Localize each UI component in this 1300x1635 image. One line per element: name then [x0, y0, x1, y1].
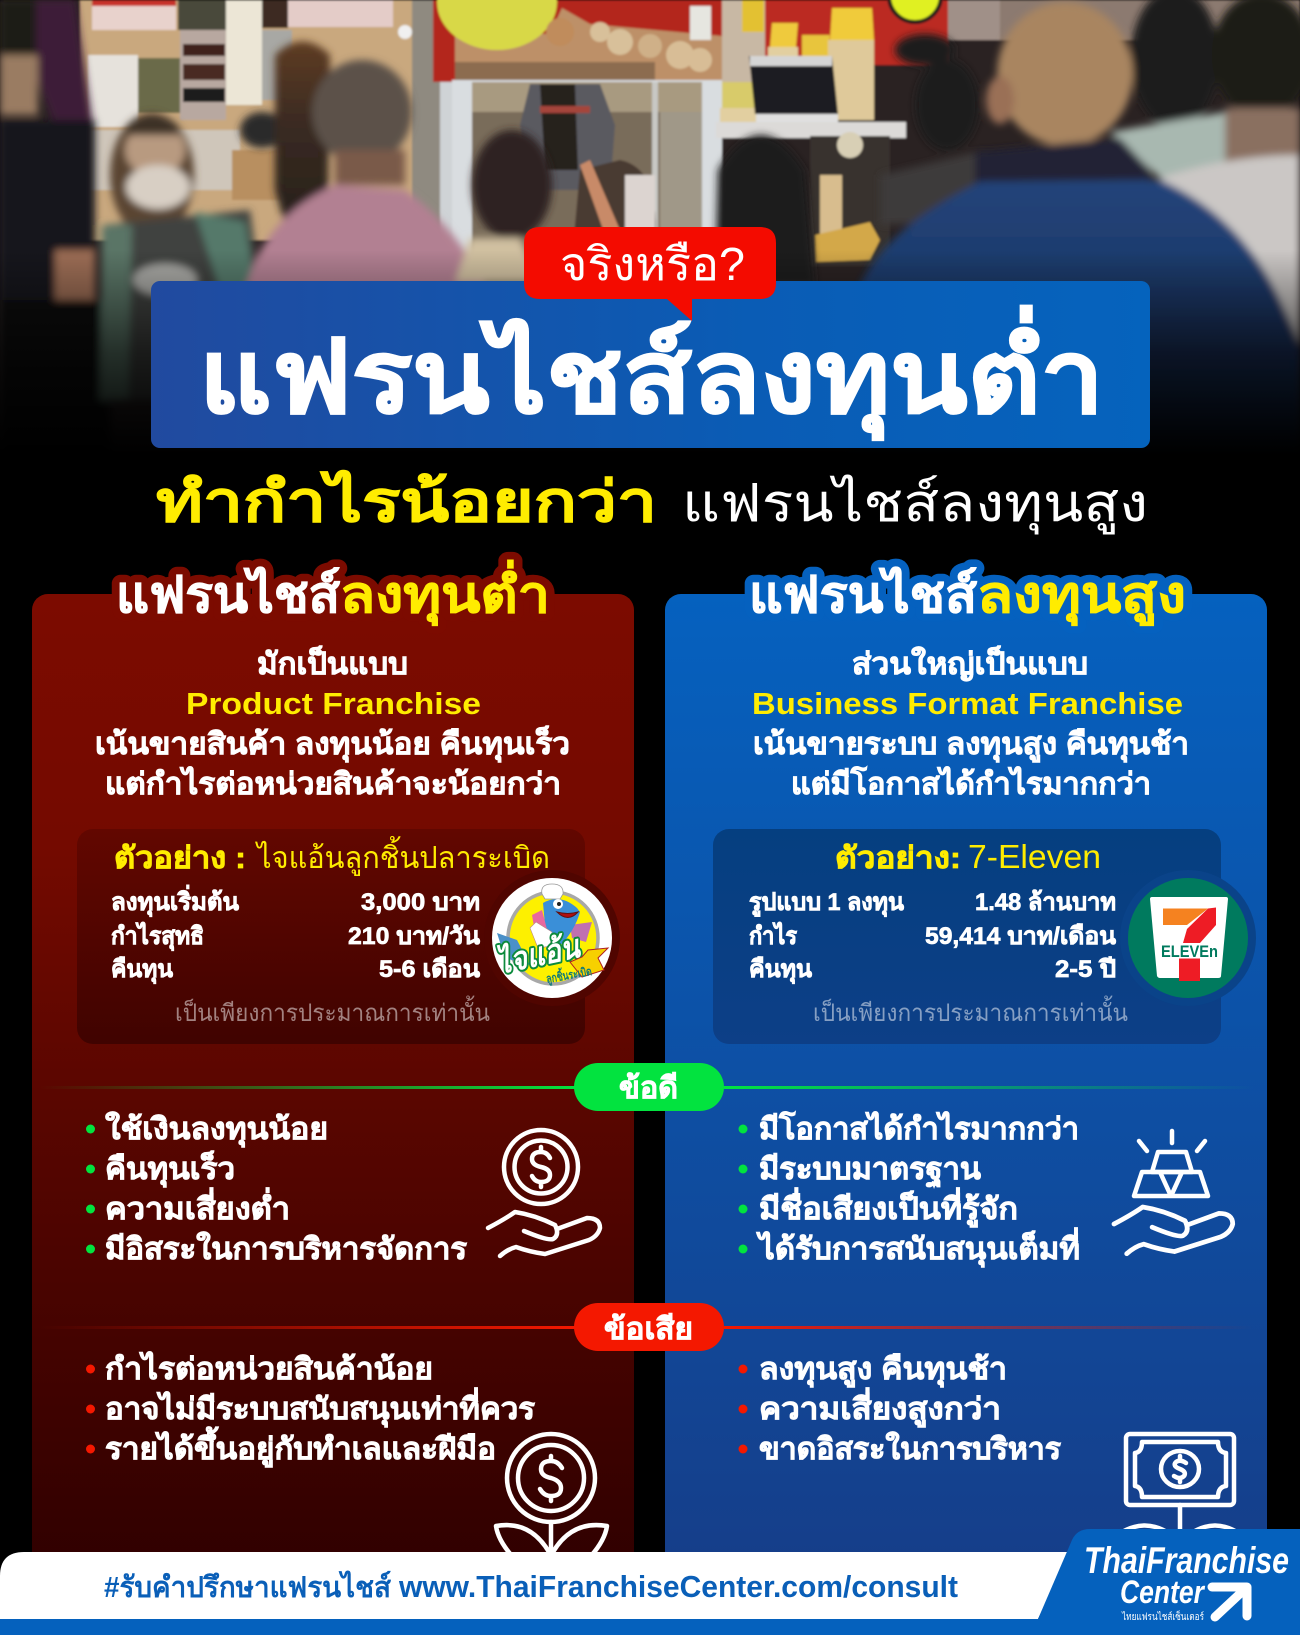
divider with badge: cons — [40, 1303, 1254, 1351]
panel heading — [749, 566, 1186, 626]
pros list — [86, 1111, 467, 1266]
description: Business Format Franchise — [752, 686, 1183, 721]
example box: 1.48 ล้านบาท — [975, 889, 1116, 916]
cons list: อาจไม่มีระบบสนับสนุนเท่าที่ควร — [105, 1387, 535, 1428]
pros list: มีอิสระในการบริหารจัดการ — [105, 1231, 467, 1266]
icon: coin over hand — [488, 1130, 600, 1256]
divider with badge: pros — [40, 1063, 1254, 1111]
pros list: ความเสี่ยงต่ำ — [105, 1187, 290, 1226]
striped shirt man — [312, 60, 412, 164]
callout bubble: จริงหรือ? — [524, 227, 776, 321]
panel heading: แฟรนไชส์ — [116, 566, 340, 623]
description: Product Franchise — [186, 686, 481, 721]
bald man — [997, 2, 1133, 146]
shop shelves — [80, 0, 450, 240]
example box: รูปแบบ 1 ลงทุน — [749, 889, 905, 918]
pros list: คืนทุนเร็ว — [105, 1150, 235, 1188]
cons list — [86, 1351, 535, 1468]
example box: 59,414 บาท/เดือน — [925, 923, 1117, 950]
divider with badge: pros: ข้อดี — [619, 1072, 678, 1105]
example box: คืนทุน — [111, 956, 174, 985]
subtitle: แฟรนไชส์ลงทุนสูง — [682, 474, 1148, 535]
long hair — [240, 112, 284, 148]
footer bar — [0, 1529, 1300, 1635]
dark hair center — [472, 130, 552, 240]
cons list: ลงทุนสูง คืนทุนช้า — [759, 1353, 1007, 1388]
example box: เป็นเพียงการประมาณการเท่านั้น — [175, 995, 490, 1027]
footer text: www.ThaiFranchiseCenter.com/consult — [398, 1569, 958, 1604]
panel heading: แฟรนไชส์ — [749, 566, 977, 623]
panel heading: ลงทุนต่ำ — [340, 560, 550, 626]
black hijab — [715, 135, 815, 285]
woman with mask — [110, 113, 194, 237]
pros list: มีระบบมาตรฐาน — [759, 1153, 981, 1189]
panel heading: แฟรนไชส์ — [116, 566, 340, 623]
example box: กำไรสุทธิ — [111, 921, 204, 952]
footer text — [104, 1569, 958, 1604]
divider with badge: cons: ข้อเสีย — [604, 1313, 693, 1346]
example box: ไจแอ้นลูกชิ้นปลาระเบิด — [255, 836, 550, 876]
pros list: ใช้เงินลงทุนน้อย — [105, 1111, 328, 1148]
icon: banknote plant — [1124, 1434, 1235, 1531]
pros list: มีชื่อเสียงเป็นที่รู้จัก — [759, 1187, 1018, 1228]
example box — [77, 829, 585, 1044]
panel heading: ลงทุนสูง — [977, 567, 1186, 626]
description: แต่มีโอกาสได้กำไรมากกว่า — [791, 765, 1151, 801]
example box: 3,000 บาท — [361, 889, 480, 916]
cons list: ขาดอิสระในการบริหาร — [759, 1431, 1061, 1466]
stall sign — [433, 0, 722, 82]
title text: แฟรนไชส์ลงทุนต่ำ — [199, 305, 1104, 441]
panel: high investment franchise — [665, 566, 1267, 1594]
panel: low investment franchise — [32, 560, 634, 1594]
fade to black — [0, 250, 1300, 455]
cons list — [738, 1353, 1061, 1466]
logo: ThaiFranchise Center: Center — [1120, 1574, 1205, 1610]
example box: 5-6 เดือน — [379, 956, 481, 983]
example box: 7-Eleven — [968, 838, 1101, 875]
example box: 210 บาท/วัน — [348, 923, 481, 950]
example box: ตัวอย่าง : — [114, 842, 246, 875]
pros list — [738, 1110, 1080, 1268]
example box — [713, 829, 1221, 1044]
example box: 2-5 ปี — [1055, 956, 1116, 983]
example box: กำไร — [749, 921, 797, 950]
pros list: มีโอกาสได้กำไรมากกว่า — [759, 1110, 1079, 1146]
example box: เป็นเพียงการประมาณการเท่านั้น — [813, 995, 1128, 1027]
description: เน้นขายสินค้า ลงทุนน้อย คืนทุนเร็ว — [95, 725, 570, 763]
logo: 7-Eleven: ELEVEn — [1161, 942, 1218, 961]
title banner: แฟรนไชส์ลงทุนต่ำ — [199, 305, 1104, 441]
left man — [32, 0, 98, 126]
panel heading: แฟรนไชส์ — [749, 566, 977, 623]
logo: 7-Eleven — [1120, 870, 1256, 1006]
panel heading — [116, 560, 550, 626]
cons list: ความเสี่ยงสูงกว่า — [759, 1387, 1001, 1428]
description: มักเป็นแบบ — [257, 645, 408, 681]
description: เน้นขายระบบ ลงทุนสูง คืนทุนช้า — [753, 728, 1189, 763]
title banner — [151, 281, 1150, 448]
pros list: ได้รับการสนับสนุนเต็มที่ — [756, 1227, 1080, 1268]
right people — [895, 34, 955, 66]
subtitle — [156, 469, 1148, 535]
description: ส่วนใหญ่เป็นแบบ — [852, 645, 1088, 682]
logo: Jai-an fish balls: ลูกชิ้นระเบิด — [545, 961, 593, 987]
example box: คืนทุน — [749, 956, 813, 985]
panel heading: ลงทุนต่ำ — [340, 560, 550, 626]
stall glass — [452, 80, 722, 285]
subtitle: ทำกำไรน้อยกว่า — [156, 469, 657, 533]
cons list: กำไรต่อหน่วยสินค้าน้อย — [105, 1351, 433, 1386]
logo: ThaiFranchise Center: ไทยแฟรนไชส์เซ็นเตอร์ — [1121, 1609, 1205, 1623]
callout bubble: จริงหรือ?: จริงหรือ? — [560, 238, 745, 290]
logo: Jai-an fish balls — [484, 870, 620, 1006]
footer text: #รับคำปรึกษาแฟรนไชส์ — [104, 1570, 391, 1604]
wall & cups — [720, 0, 767, 84]
example box: ลงทุนเริ่มต้น — [111, 884, 240, 918]
icon: gold bars over hand — [1114, 1131, 1233, 1254]
photo: crowd in front of food stall — [0, 0, 1300, 430]
description: แต่กำไรต่อหน่วยสินค้าจะน้อยกว่า — [105, 766, 561, 801]
description — [95, 645, 570, 801]
description — [752, 645, 1189, 801]
panel heading: ลงทุนสูง — [977, 567, 1186, 626]
logo: ThaiFranchise Center — [1038, 1529, 1300, 1635]
example box: ตัวอย่าง: — [835, 842, 961, 875]
cons list: รายได้ขึ้นอยู่กับทำเลและฝีมือ — [105, 1426, 496, 1468]
icon: money flower — [496, 1434, 607, 1556]
logo: Jai-an fish balls: ไจแอ้น — [493, 927, 584, 981]
